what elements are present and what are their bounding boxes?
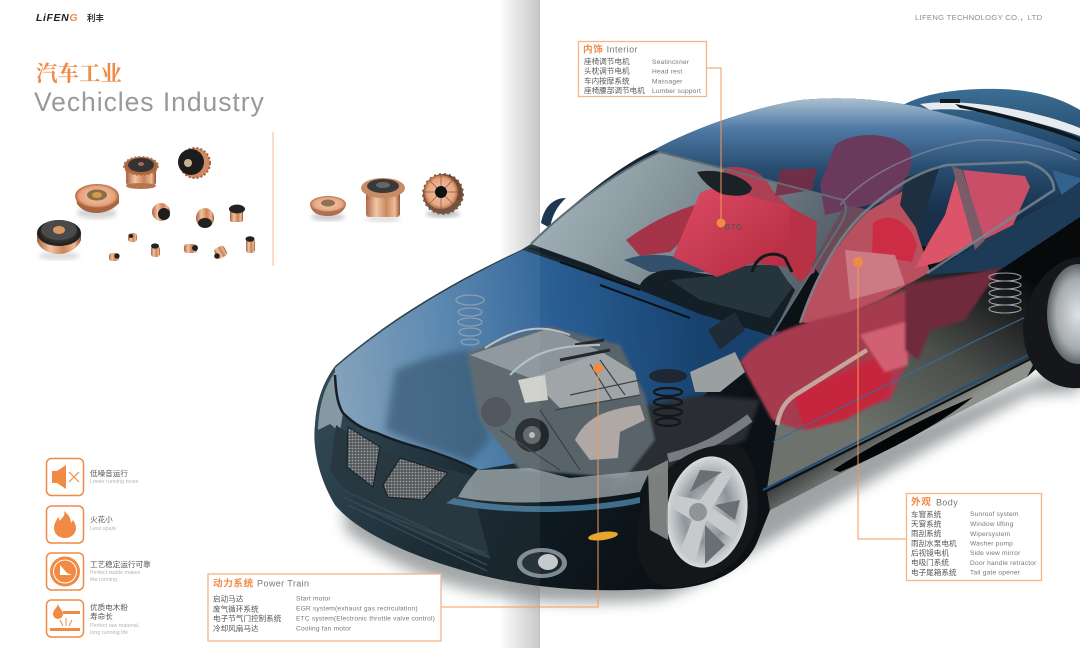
callout: interior: 头枕调节电机 [584,66,630,76]
callout: body: 电吸门系统 [911,557,949,567]
callout: body: Window lifting [970,521,1014,528]
belt line [773,288,1080,442]
marker [853,257,863,267]
far side roof [903,89,1080,160]
logo: 利丰 [87,13,105,23]
lower intake [343,490,490,571]
fog lamp [517,548,567,578]
side window frame [800,162,1054,323]
feature: quality material: long running life [90,630,128,636]
feature: less spark: 火花小 [90,514,113,524]
cowl and dashboard [527,248,795,336]
right grille [383,458,448,500]
left page wash [310,200,540,648]
hood [335,250,780,470]
callout: body: 雨刮水泵电机 [911,538,957,548]
car illustration [310,89,1080,648]
callout: power train: 电子节气门控制系统 [213,613,282,623]
title [34,62,265,117]
feature: stable process: 工艺稳定运行可靠 [90,559,151,569]
icon: flame [46,506,84,543]
rear wheel [1023,257,1080,388]
leader line [441,368,598,607]
hood ghost structure [385,350,490,462]
title: Vechicles Industry [34,87,265,117]
feature: quality material: 优质电木粉 [90,602,128,612]
windshield [531,152,846,335]
callout: body: 后视镜电机 [911,548,949,558]
leader line [858,262,906,539]
leader line [707,68,721,222]
callout: body: 天窗系统 [911,518,942,528]
side door panel [767,182,1080,489]
roof rail highlights [920,99,1080,142]
callout: power train: EGR system(exhaust gas recirculation) [296,606,418,612]
headlight [458,468,650,502]
marker [716,218,726,228]
roof glass [654,98,1080,270]
callout: body [853,257,1042,580]
exhaust pipe [777,350,867,425]
title: 汽车工业 [36,62,122,86]
company name: LIFENG TECHNOLOGY CO.，LTD [915,13,1043,22]
callout: interior: Massager [652,78,683,86]
hood lower edge [335,375,477,470]
callout: interior: Lumber support [652,88,701,95]
marker [593,363,603,373]
callout: power train: 启动马达 [213,594,244,604]
feature: less spark: Less spark [90,526,116,532]
callout: body: 外观 [911,496,931,508]
engine [467,326,655,478]
callout: interior: 车内按摩系统 [584,76,630,86]
rear suspension [989,273,1021,313]
callout: body: 车窗系统 [911,509,942,519]
rear pillar blue [1030,170,1080,250]
rear seats through roof [775,135,911,215]
callout: power train: Cooling fan motor [296,626,352,632]
feature: low noise: 低噪音运行 [90,468,128,478]
product group: three commutators [310,174,463,222]
callout: power train: 冷却风扇马达 [213,623,259,633]
callout: body: Sunroof system [970,511,1019,518]
callout: body: Washer pump [970,540,1013,548]
outer door frame [840,140,1077,205]
wipers [560,262,690,318]
front seats [673,167,817,282]
center interior [800,190,930,325]
callout: interior: 内饰 Interior [583,44,638,56]
callout: interior: 座椅腰部调节电机 [584,85,645,95]
feature: low noise [46,458,139,496]
callout: body: 雨刮系统 [911,528,942,538]
page fold shadow [500,0,540,648]
door trim seen through glass [626,203,703,256]
divider line [272,132,274,266]
feature: quality material: 寿命长 [90,611,113,621]
rear view mirror [697,171,752,196]
lower red seats [740,268,1000,430]
car body silhouette [314,98,1080,590]
callout: power train: Start motor [296,596,331,602]
callout: interior [578,42,726,228]
feature: stable process: the running [90,577,117,583]
amber marker [588,530,618,542]
callout: power train: ETC system(Electronic throttle valve control) [296,616,435,622]
callout: body: 电子尾箱系统 [911,567,957,577]
logo: LiFENG [36,12,78,24]
ground shadow [345,360,1080,602]
sill slit [833,397,973,472]
icon: muted speaker [46,458,84,496]
left strut [456,295,484,345]
right strut [649,312,745,426]
callout: power train: 废气循环系统 [213,604,259,614]
intake pipe [668,418,750,458]
feature: stable process [46,553,151,590]
icon: gauge [46,553,84,590]
feature: quality material [46,600,140,637]
sill [767,357,1037,510]
windshield frame [531,152,846,335]
callout: body: Side view mirror [970,550,1021,557]
callout: interior: Seatinclıner [652,59,690,66]
callout: body: Tail gate opener [970,570,1021,576]
product group: small commutators [37,148,255,261]
feature: stable process: Perfect stable makes [90,570,141,576]
feature: low noise: Lower running noise [90,479,139,485]
front wheel [637,445,758,588]
door lower blue line [763,353,1032,490]
callout: interior: 座椅调节电机 [584,56,630,66]
icon: bakelite powder [46,600,84,637]
callout: power train [208,363,603,641]
callout: power train: 动力系统 Power Train [213,578,309,590]
logo [36,12,105,24]
headlamp [318,372,343,432]
feature: quality material: Perfect raw material, [90,623,140,629]
feature: less spark [46,506,116,543]
rear door window [963,170,1030,240]
mirror [541,198,566,228]
front seats: GTO [724,223,743,232]
callout: body: Door handle retractor [970,560,1037,567]
callout: interior: Head rest [652,68,682,76]
front fascia [330,425,490,558]
callout: body: Body [936,498,958,508]
engine bay dark area [610,395,760,490]
callout: body: Wipersystem [970,531,1011,538]
left grille [347,427,380,487]
